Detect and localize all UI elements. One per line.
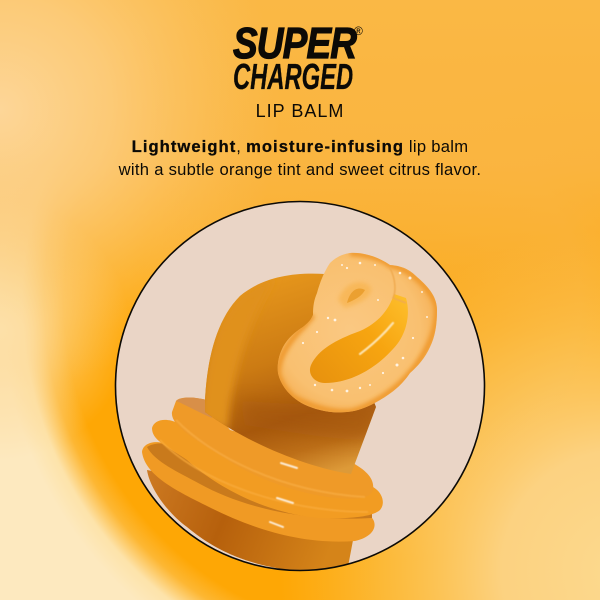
icon: bullet shaft <box>200 274 380 474</box>
product photo circle <box>114 200 486 572</box>
description text <box>118 137 481 179</box>
large hole in swirl <box>310 294 408 383</box>
ring one <box>172 398 374 488</box>
title: SUPER: SUPER <box>233 19 356 68</box>
glitter highlights <box>302 262 428 392</box>
title: CHARGED: CHARGED <box>233 56 353 97</box>
ring two <box>152 420 383 518</box>
description text: Lightweight, moisture-infusing lip balm <box>132 137 468 156</box>
subtitle: lip balm: LIP BALM <box>256 101 344 121</box>
registered mark: ® <box>354 24 363 38</box>
ring three <box>142 442 375 542</box>
icon: lip balm tube base <box>147 470 354 572</box>
description text: with a subtle orange tint and sweet citrus flavor. <box>119 160 481 179</box>
icon: balm swirl <box>278 253 437 412</box>
icon: ribbed collar rings <box>142 398 383 542</box>
small hole in swirl <box>347 289 365 303</box>
